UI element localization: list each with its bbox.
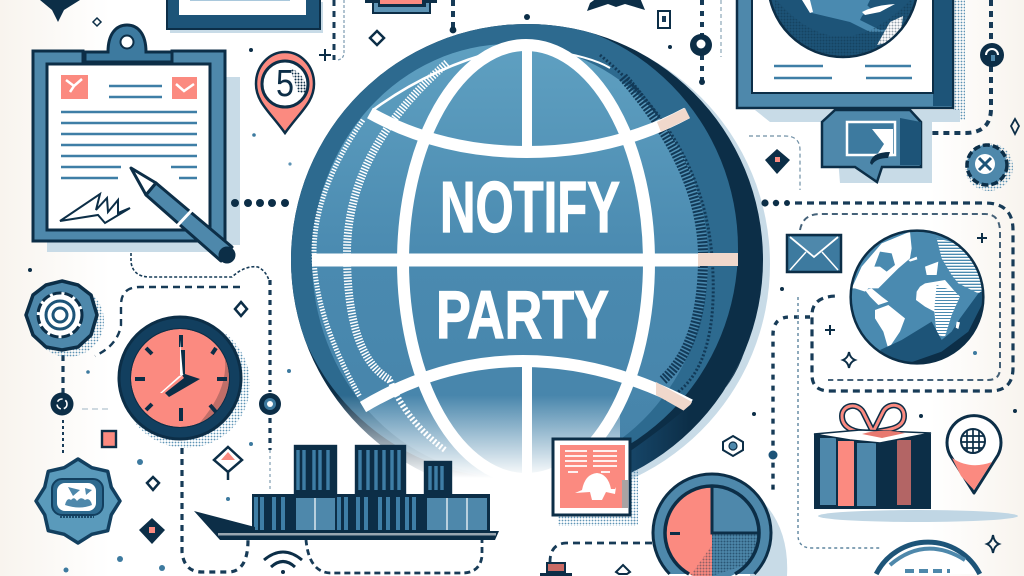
africa (916, 280, 960, 337)
icon: speech bubble with image (822, 110, 932, 183)
pen (131, 168, 234, 262)
icon: wifi signal (264, 552, 302, 574)
icon: small square (102, 431, 116, 447)
monitor text lines (774, 66, 912, 78)
pie shadow (750, 490, 787, 576)
document text lines (61, 86, 197, 178)
south america (875, 305, 905, 349)
icon: gift box (814, 405, 1018, 522)
icon: location pin with number (256, 52, 314, 133)
globe: central Notify Party sphere (280, 18, 770, 505)
icon: right circular node (259, 393, 281, 415)
signature (60, 194, 130, 223)
eurasia hatch (937, 238, 987, 293)
icon: left circular node (50, 392, 74, 416)
clock face (131, 329, 229, 427)
icon: salmon document (553, 439, 638, 526)
icon: world globe (850, 230, 988, 368)
icon: small device (658, 11, 670, 28)
icon: small target diamond (723, 436, 743, 456)
icon: kite diamond (214, 447, 242, 480)
icon: node top right (690, 34, 712, 56)
icon: node right (980, 43, 1004, 67)
clock marks and hands (135, 335, 227, 421)
globe dark lower right (575, 350, 745, 489)
monitor halftone shadow (953, 0, 965, 120)
ship hull (194, 511, 499, 540)
title text: PARTY (436, 277, 609, 353)
checkmark boxes (61, 75, 88, 99)
icon: open book (587, 0, 645, 11)
clipboard clip (85, 25, 172, 62)
icon: target gear (26, 281, 104, 357)
globe bottom fade (280, 395, 620, 505)
globe shaded night side (880, 291, 982, 362)
clipboard shadow (47, 77, 240, 252)
diamond accents (149, 157, 780, 533)
icon: location pin with grid globe (947, 416, 1001, 493)
globe grid lines (312, 45, 700, 490)
icon: monitor with globe (737, 0, 965, 122)
icon: clipboard with signed document (33, 25, 240, 262)
clipboard board (33, 51, 225, 241)
clock halftone shadow (122, 320, 250, 448)
title text: NOTIFY (440, 168, 620, 248)
clock ring (119, 317, 241, 439)
gift shadow (818, 510, 1018, 522)
globe pink highlights (656, 108, 738, 412)
icon: location pin with number: 5 (276, 63, 294, 105)
paper (47, 64, 210, 230)
title text (436, 168, 620, 353)
monitor frame (737, 0, 953, 108)
icon: bottom right magnifier ring (876, 542, 980, 574)
globe body (285, 18, 770, 500)
gift bow (842, 405, 904, 432)
lower containers (252, 494, 490, 532)
icon: envelope (787, 235, 841, 272)
icon: gear right (965, 143, 1013, 191)
icon: container ship (194, 446, 499, 540)
icon: top frame (167, 0, 323, 33)
top containers (295, 446, 451, 493)
northern landmass (852, 232, 912, 292)
icon: pie chart clock (653, 474, 787, 576)
monitor globe (769, 0, 917, 60)
pie ring (653, 474, 771, 574)
gift body (814, 434, 931, 509)
pie slices (666, 488, 758, 576)
globe drop shadow (298, 28, 770, 500)
icon: bottom small box (540, 563, 572, 576)
icon: clock (119, 317, 250, 448)
icon: top center badge (365, 0, 437, 13)
icon: gear with map (36, 459, 120, 543)
